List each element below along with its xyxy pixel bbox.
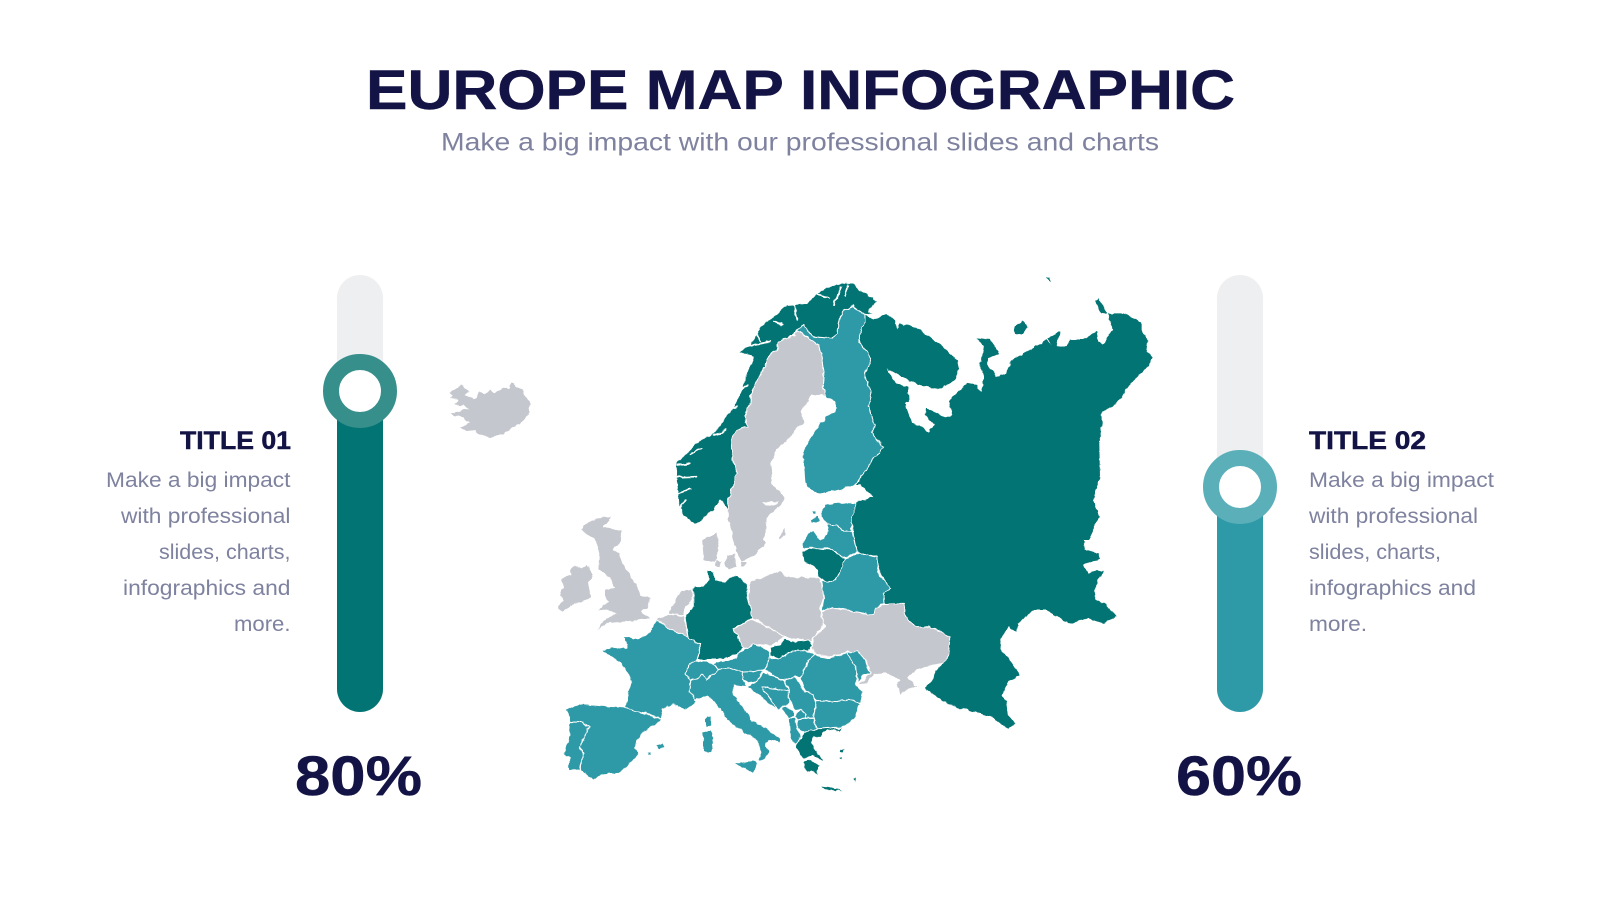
Southern Europe and Balkans [684,639,870,791]
Iceland [449,382,531,438]
Latvia [802,525,857,558]
Portugal [564,722,589,771]
France [602,619,701,719]
body: title 02 description [1308,469,1494,636]
panel: right slider 60% [1176,275,1302,807]
Greece [795,726,856,791]
map of Europe [449,277,1153,791]
body: title 01 description [106,469,291,636]
Romania [801,653,863,703]
Kosovo [794,709,806,720]
Estonia [821,502,856,532]
body: title 02 description: more. [1309,613,1367,636]
left value: 80% [295,744,422,807]
text block: title 02 [1308,427,1494,636]
left slider fill [337,391,383,712]
Switzerland [684,661,718,680]
Italy [689,668,780,762]
left slider knob [331,362,389,420]
Baltics and Belarus [802,502,857,558]
heading: title 01: TITLE 01 [180,427,291,455]
body: title 01 description: Make a big impact [106,469,291,492]
Croatia [747,672,788,710]
Peloponnese, Crete and islands [803,749,856,791]
panel: left slider 80% [295,275,422,807]
Swedish lake [762,501,780,506]
right slider knob [1211,458,1269,516]
British Isles and north-west [557,517,786,630]
Hungary [765,651,815,680]
body: title 01 description: with professional [120,505,291,528]
body: title 02 description: infographics and [1309,577,1476,600]
right slider fill [1217,487,1263,712]
Russia north part [852,313,1153,540]
Belarus [820,553,892,615]
Norway [676,283,878,525]
right slider track [1217,275,1263,712]
body: title 01 description: slides, charts, [159,541,290,564]
Russia south part [852,513,1117,728]
Sicily [735,761,757,773]
Norwegian fjords [677,285,848,507]
Spain [566,704,662,781]
Western and central Europe [564,570,825,781]
Scandinavia [676,283,883,562]
North Macedonia [797,718,817,733]
title: EUROPE MAP INFOGRAPHIC [366,58,1235,121]
Greek mainland [795,726,844,762]
Poland [748,571,825,642]
Estonian islands [810,511,819,522]
Czech Republic [733,619,785,648]
body: title 01 description: infographics and [123,577,290,600]
body: title 02 description: with professional [1308,505,1478,528]
Balearic islands [647,744,664,755]
Russian arctic islands [1015,277,1108,335]
heading: title 02: TITLE 02 [1309,427,1426,455]
Finland [797,306,883,494]
right value: 60% [1176,744,1302,807]
body: title 02 description: Make a big impact [1309,469,1494,492]
Slovakia [769,639,813,658]
Slovenia [742,671,763,683]
Eastern Europe [802,548,950,695]
Sweden [728,330,826,562]
Denmark [702,527,786,570]
body: title 02 description: slides, charts, [1309,541,1441,564]
Corsica [706,715,711,727]
subtitle: Make a big impact with our professional slides and charts [441,128,1159,156]
Netherlands [668,589,693,616]
Montenegro [782,706,794,718]
text block: title 01 [106,427,291,636]
Austria [712,645,770,673]
Belgium [657,614,688,637]
Sardinia [703,731,713,752]
Ireland [557,565,593,612]
body: title 01 description: more. [234,613,290,636]
Serbia [785,677,817,718]
Bosnia [762,687,790,710]
Russia [852,277,1153,728]
Germany [685,570,753,660]
Bulgaria [813,699,860,728]
Great Britain [582,517,650,630]
left slider track [337,275,383,712]
Albania [788,717,801,745]
Ukraine [812,603,950,695]
Moldova [847,652,870,685]
Lithuania [802,548,845,583]
